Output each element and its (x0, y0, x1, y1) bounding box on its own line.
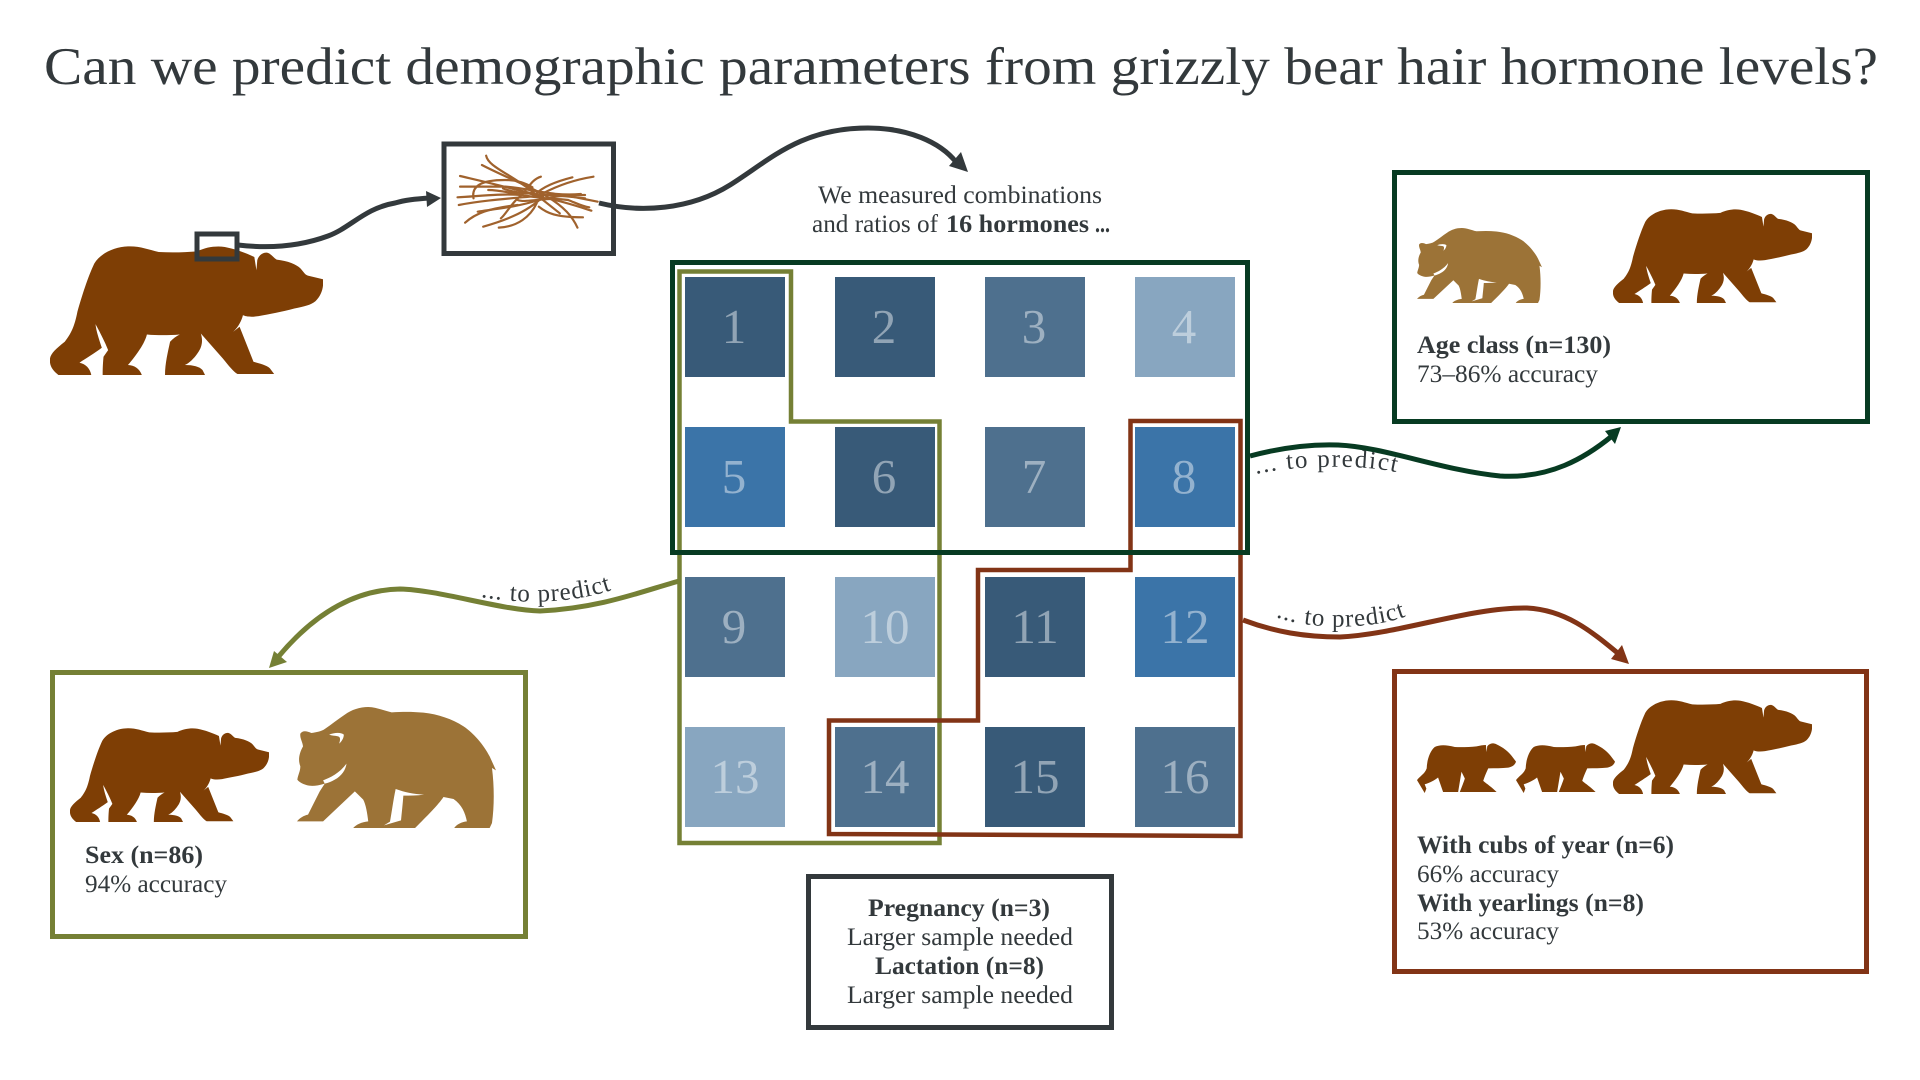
icon: male brown bear (70, 728, 269, 822)
text: reproductive results: 53% accuracy (1417, 918, 1559, 945)
panel: reproductive status (1394, 672, 1866, 972)
chart: 16 hormone grid: 13 (710, 749, 760, 804)
text: hormones intro: and ratios of (812, 211, 939, 238)
icon: brown bear sampled for hair (50, 246, 323, 375)
chart: 16 hormone grid: 8 (1172, 449, 1196, 504)
chart: 16 hormone grid: 5 (722, 449, 746, 504)
label: to predict, age class: ... to predict (1257, 450, 1398, 474)
icon: second cub (1516, 743, 1615, 793)
panel: pregnancy and lactation: Lactation (n=8) (875, 953, 1044, 980)
icon: mother bear (1613, 700, 1812, 794)
text: sex result: Sex (n=86) (85, 842, 203, 869)
chart: 16 hormone grid: 16 (1160, 749, 1210, 804)
arrow: hair sample to hormones (599, 128, 968, 208)
icon: adult brown bear (1613, 209, 1812, 303)
chart: 16 hormone grid: 7 (1022, 449, 1046, 504)
text: age class result (1417, 332, 1611, 388)
text: reproductive results: With yearlings (n=8) (1417, 890, 1644, 917)
text: hormones intro (812, 182, 1110, 238)
text: age class result: 73–86% accuracy (1417, 361, 1598, 388)
arrow: bear to hair sample (238, 191, 441, 247)
arrow: to reproductive status (1243, 608, 1629, 664)
chart: 16 hormone grid: 14 (860, 749, 910, 804)
outline: hormones predicting sex (680, 272, 940, 843)
chart: 16 hormone grid: 15 (1010, 749, 1060, 804)
panel: hair sample (444, 144, 614, 254)
label: to predict, age class (1257, 450, 1398, 474)
panel: age class (1394, 172, 1868, 422)
panel: pregnancy and lactation: Larger sample needed (847, 982, 1074, 1009)
chart: 16 hormone grid: 4 (1172, 299, 1196, 354)
text: hormones intro: 16 hormones (946, 211, 1089, 238)
arrow: to sex (269, 581, 679, 668)
text: reproductive results: With cubs of year (n=6) (1417, 832, 1674, 859)
text: reproductive results: 66% accuracy (1417, 861, 1559, 888)
icon: female tan bear (297, 707, 496, 828)
chart: 16 hormone grid: 1 (722, 299, 746, 354)
label: to predict, reproductive status: ... to predict (1278, 604, 1406, 632)
title: Can we predict demographic parameters from grizzly bear hair hormone levels? (44, 38, 1878, 96)
text: age class result: Age class (n=130) (1417, 332, 1611, 359)
chart: 16 hormone grid: 2 (872, 299, 896, 354)
icon: first cub (1417, 743, 1516, 793)
text: reproductive results (1417, 832, 1674, 945)
chart: 16 hormone grid: 6 (872, 449, 896, 504)
chart: 16 hormone grid: 12 (1160, 599, 1210, 654)
icon: young tan bear (1417, 228, 1542, 303)
arrow: to age class (1250, 427, 1621, 476)
text: sex result (85, 842, 227, 898)
chart: 16 hormone grid: 11 (1011, 599, 1059, 654)
text: hormones intro: We measured combinations (818, 182, 1102, 209)
chart: 16 hormone grid: 9 (722, 599, 746, 654)
label: to predict, sex: ... to predict (482, 578, 612, 607)
text: hormones intro: ... (1095, 211, 1110, 238)
outline: hormones predicting age class (672, 262, 1248, 552)
chart: 16 hormone grid: 3 (1022, 299, 1046, 354)
panel: sex (52, 672, 526, 936)
chart: 16 hormone grid: 10 (860, 599, 910, 654)
sampling marker on bear (197, 234, 237, 259)
chart: 16 hormone grid (685, 277, 1235, 827)
outline: hormones predicting reproductive status (829, 421, 1240, 836)
panel: pregnancy and lactation (808, 876, 1112, 1028)
text: sex result: 94% accuracy (85, 871, 227, 898)
panel: pregnancy and lactation: Larger sample needed (847, 924, 1074, 951)
panel: pregnancy and lactation: Pregnancy (n=3) (868, 895, 1050, 922)
